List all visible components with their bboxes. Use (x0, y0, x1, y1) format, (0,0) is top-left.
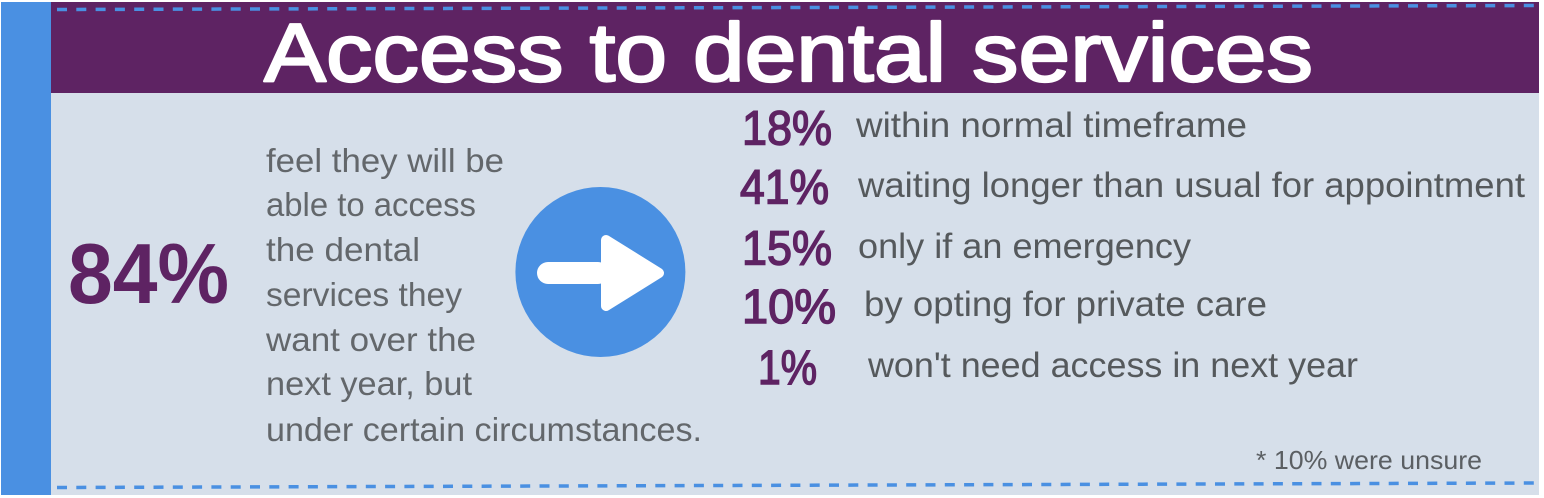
row: 10%: by opting for private care (864, 285, 1267, 324)
panel: title banner (51, 2, 1539, 99)
row: 18%: within normal timeframe (855, 106, 1247, 145)
list: access breakdown (740, 102, 1525, 395)
row: 10% (742, 281, 1267, 334)
text block: description: under certain circumstances. (266, 411, 702, 448)
row: 41% (740, 162, 1525, 214)
big statistic: 84% (68, 227, 229, 322)
text block: description: able to access (266, 186, 476, 223)
text block: description: services they (266, 276, 463, 313)
row: 15% (742, 222, 1192, 276)
row: 41%: 41% (740, 162, 829, 214)
row: 1%: won't need access in next year (867, 346, 1358, 385)
row: 15%: only if an emergency (858, 227, 1192, 266)
row: 1% (758, 342, 1358, 395)
text block: description: the dental (266, 231, 420, 268)
text block: description: next year, but (266, 365, 472, 402)
left accent bar (1, 2, 51, 495)
row: 41%: waiting longer than usual for appointment (857, 166, 1525, 205)
row: 1%: 1% (758, 342, 817, 395)
row: 15%: 15% (742, 222, 832, 276)
row: 18% (742, 102, 1247, 156)
footnote: * 10% were unsure (1256, 445, 1482, 475)
row: 10%: 10% (742, 281, 836, 334)
title: Access to dental services (264, 6, 1313, 99)
panel: background (51, 93, 1539, 495)
icon: arrow in circle (515, 187, 685, 357)
text block: description (265, 142, 702, 448)
row: 18%: 18% (742, 102, 832, 156)
text block: description: want over the (265, 321, 476, 358)
text block: description: feel they will be (266, 142, 504, 179)
